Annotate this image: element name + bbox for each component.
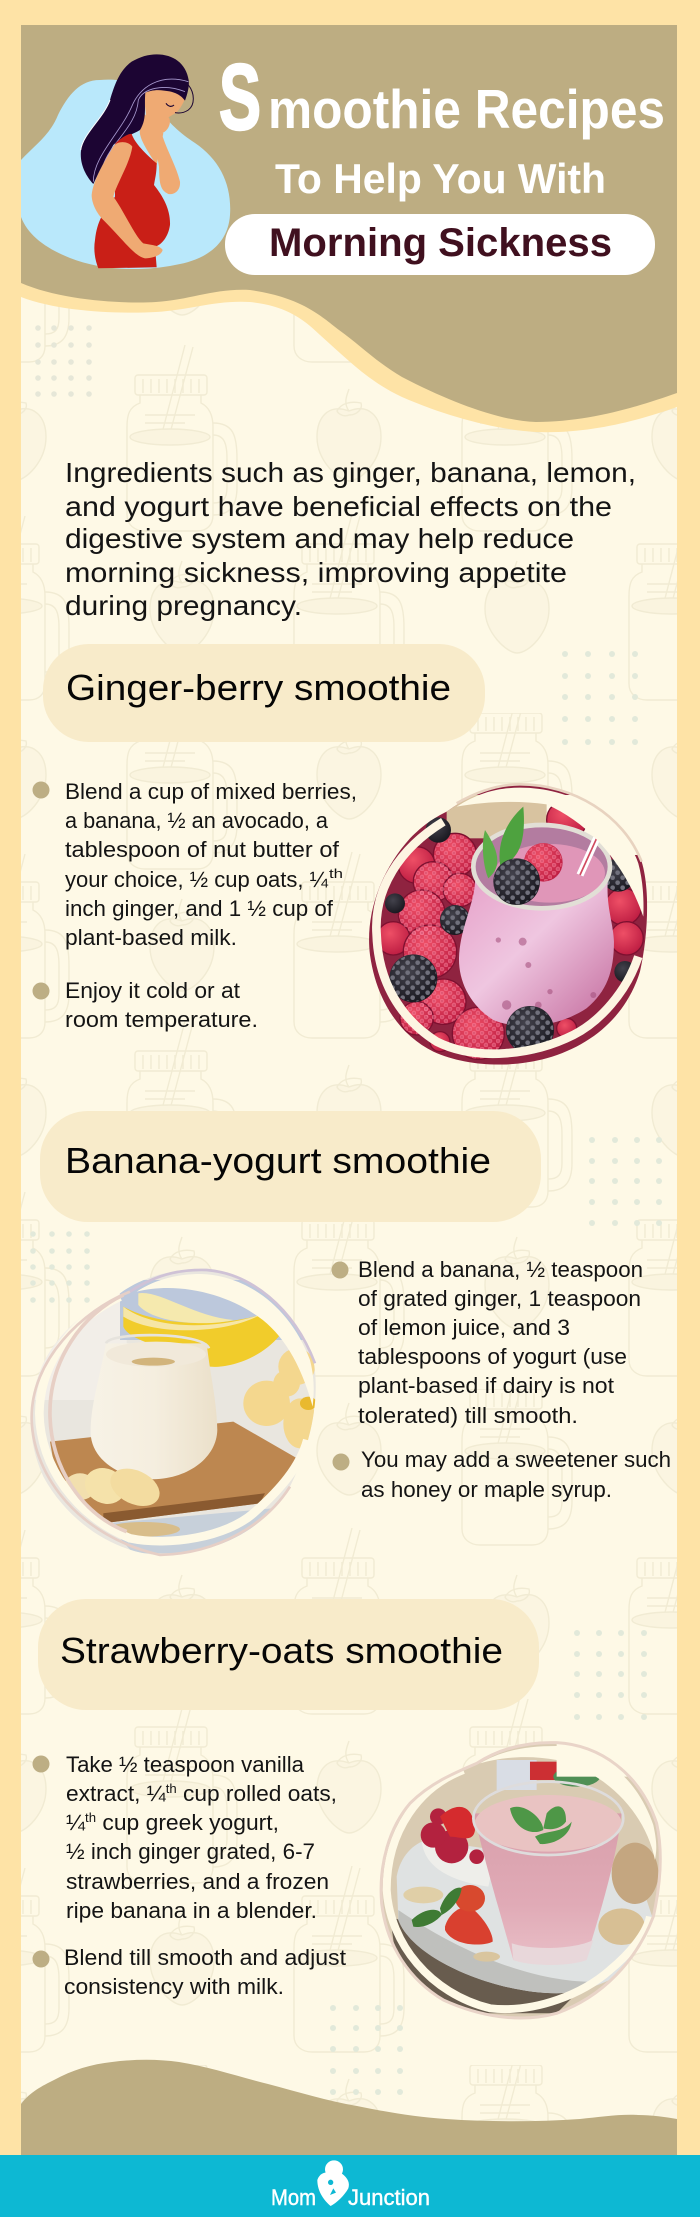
banana-yogurt instructions: tablespoons of yogurt (use <box>358 1344 627 1369</box>
jar body <box>459 875 614 1026</box>
title pill <box>225 214 655 275</box>
dot grid: right of ginger-berry heading <box>562 651 638 745</box>
oats jar <box>612 1843 658 1904</box>
banana-yogurt instructions: as honey or maple syrup. <box>361 1477 612 1502</box>
banana-yogurt instructions: You may add a sweetener such <box>361 1447 671 1472</box>
section heading: banana-yogurt <box>40 1111 541 1222</box>
bowl <box>422 1840 495 1887</box>
ginger-berry instructions <box>32 779 357 1032</box>
banana-yogurt instructions: of grated ginger, 1 teaspoon <box>358 1286 641 1311</box>
ginger-berry instructions: room temperature. <box>65 1007 258 1032</box>
ginger-berry instructions: a banana, ½ an avocado, a <box>65 808 328 833</box>
photo cream crescent and band <box>480 1746 656 1860</box>
strawberry-oats instructions: ¼ <box>66 1810 85 1835</box>
title line 2: To Help You With <box>275 155 606 202</box>
strawberry-oats instructions: Blend till smooth and adjust <box>64 1945 347 1970</box>
banana-yogurt instructions: tolerated) till smooth. <box>358 1403 578 1428</box>
dot grid: above banana photo <box>30 1231 90 1303</box>
strawberry-oats instructions: cup rolled oats, <box>177 1781 337 1806</box>
ginger-berry instructions: tablespoon of nut butter of <box>65 837 340 862</box>
intro paragraph: Ingredients such as ginger, banana, lemon, <box>65 457 636 488</box>
ginger-berry instructions: Blend a cup of mixed berries, <box>65 779 357 804</box>
header banner <box>21 25 677 422</box>
logo wordmark <box>271 2185 430 2210</box>
blue blob <box>21 80 230 269</box>
section heading: ginger-berry: Ginger-berry smoothie <box>66 667 451 708</box>
strawberry-oats instructions <box>32 1752 347 1999</box>
banana <box>123 1307 280 1367</box>
title pill: Morning Sickness <box>269 221 612 265</box>
dark table <box>392 1918 572 2014</box>
section heading: strawberry-oats: Strawberry-oats smoothie <box>60 1630 503 1671</box>
intro paragraph: morning sickness, improving appetite <box>65 557 567 588</box>
logo wordmark: Junction <box>348 2185 430 2210</box>
ginger-berry instructions: th <box>329 866 343 881</box>
dot grid: top left <box>35 325 92 397</box>
footer bar <box>0 2155 700 2217</box>
photo cream crescent and band <box>457 788 644 917</box>
logo wordmark: Mom <box>271 2185 316 2210</box>
intro paragraph: digestive system and may help reduce <box>65 523 574 554</box>
strawberry-oats instructions: th <box>85 1810 96 1825</box>
photo: banana smoothie <box>30 1268 316 1556</box>
photo cream crescent and band <box>137 1274 314 1407</box>
board slices <box>66 1473 90 1500</box>
banana-yogurt instructions: of lemon juice, and 3 <box>358 1315 570 1340</box>
glass <box>474 1813 622 1963</box>
ginger-berry instructions: plant-based milk. <box>65 925 237 950</box>
title line 1 <box>219 45 665 149</box>
strawberry-oats instructions: ½ inch ginger grated, 6-7 <box>66 1839 315 1864</box>
title line 1: moothie Recipes <box>268 78 665 140</box>
dot grid: right of banana heading <box>589 1137 662 1226</box>
banana slices <box>243 1348 317 1448</box>
woman figure <box>81 54 193 268</box>
intro paragraph: and yogurt have beneficial effects on the <box>65 491 612 522</box>
strawberry-oats instructions: strawberries, and a frozen <box>66 1869 329 1894</box>
dot grid: above footer wave <box>330 2005 403 2095</box>
strawberry-oats instructions: consistency with milk. <box>64 1974 284 1999</box>
dot grid: right of strawberry heading <box>574 1630 647 1720</box>
strawberry-oats instructions: cup greek yogurt, <box>96 1810 279 1835</box>
logo icon: mother and child <box>317 2160 349 2206</box>
section heading: ginger-berry <box>43 644 485 742</box>
ginger-berry instructions: inch ginger, and 1 ½ cup of <box>65 896 334 921</box>
illustration: pregnant woman on blue blob <box>21 54 230 269</box>
cutting board <box>50 1422 300 1523</box>
header wave trim <box>21 25 677 432</box>
strawberry-oats instructions: extract, ¼ <box>66 1781 165 1806</box>
banana-yogurt instructions: plant-based if dairy is not <box>358 1373 615 1398</box>
oats <box>598 1908 645 1945</box>
strawberries on plate <box>445 1906 493 1945</box>
section heading: banana-yogurt: Banana-yogurt smoothie <box>65 1140 491 1181</box>
plate <box>397 1840 657 1993</box>
photo: berry smoothie <box>369 783 648 1065</box>
banana-yogurt instructions: Blend a banana, ½ teaspoon <box>358 1257 643 1282</box>
ginger-berry instructions: Enjoy it cold or at <box>65 978 241 1003</box>
strawberry-oats instructions: th <box>166 1781 177 1796</box>
footer wave <box>21 2060 677 2160</box>
strawberry-oats instructions: ripe banana in a blender. <box>66 1898 317 1923</box>
strawberry-oats instructions: Take ½ teaspoon vanilla <box>66 1752 304 1777</box>
banana-yogurt instructions <box>332 1257 671 1502</box>
photo: strawberry smoothie <box>380 1741 662 2020</box>
intro paragraph: during pregnancy. <box>65 590 302 621</box>
title line 1: S <box>219 45 261 149</box>
intro paragraph <box>65 457 636 621</box>
ginger-berry instructions: your choice, ½ cup oats, ¼ <box>65 867 328 892</box>
title <box>219 45 665 275</box>
glass <box>91 1343 217 1479</box>
MomJunction logo <box>271 2160 430 2210</box>
section heading: strawberry-oats <box>38 1599 539 1710</box>
